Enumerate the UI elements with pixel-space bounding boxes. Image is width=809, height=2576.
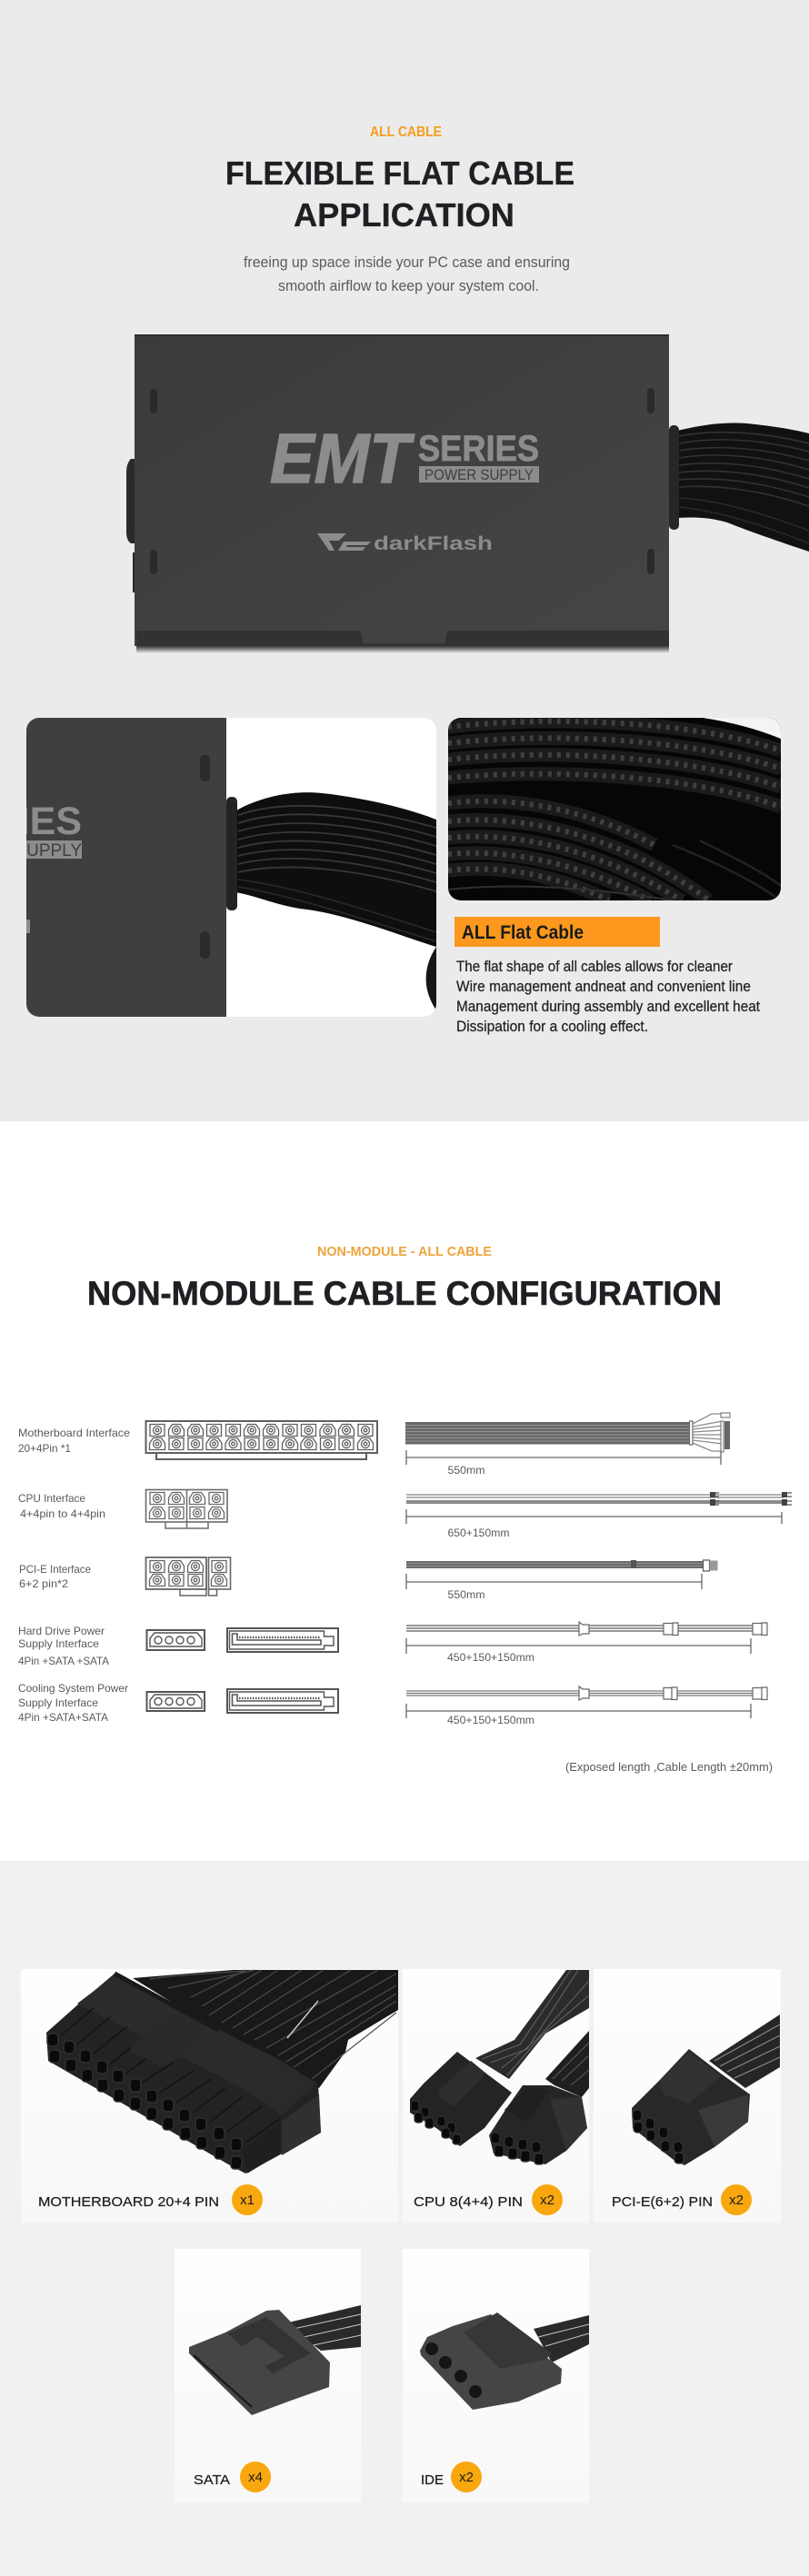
panel: cpu connector — [403, 1969, 589, 2223]
caption: PCI-E(6+2) PIN — [612, 2194, 713, 2210]
description text: Management during assembly and excellent heat — [456, 998, 760, 1015]
section: connector photos background — [0, 1861, 809, 2576]
title: flexible flat cable application: APPLICATION — [294, 196, 514, 234]
connector diagram: 24 pin — [145, 1421, 377, 1459]
cable bundle — [405, 1422, 689, 1445]
description text: Dissipation for a cooling effect. — [456, 1018, 648, 1035]
housing top — [77, 1975, 282, 2088]
slots — [200, 755, 210, 959]
orange label bar — [454, 917, 660, 947]
connector base silhouette — [46, 1974, 321, 2173]
close-up background — [448, 718, 781, 900]
slot — [194, 2355, 252, 2407]
cable one — [475, 1970, 589, 2079]
title: flexible flat cable application — [225, 154, 574, 234]
dimension line — [406, 1638, 751, 1654]
collar — [689, 1421, 693, 1445]
connectors — [710, 1492, 787, 1506]
caption: IDE — [421, 2472, 444, 2488]
cable highlights — [150, 1970, 396, 2079]
body — [189, 2310, 330, 2415]
badge x4 — [240, 2462, 271, 2492]
wires — [534, 2315, 589, 2362]
badge x2: x2 — [540, 2193, 554, 2208]
note: exposed length: (Exposed length ,Cable Length ±20mm) — [565, 1761, 773, 1774]
length: 450+150+150mm — [447, 1714, 534, 1726]
pin block separators — [61, 2008, 280, 2143]
photo background — [21, 1969, 398, 2223]
fan out wires — [693, 1414, 723, 1451]
right side face — [550, 2097, 587, 2151]
clip well — [227, 2317, 311, 2373]
subtitle text — [244, 254, 570, 294]
clip — [464, 2312, 552, 2369]
panel: braided cable close-up — [448, 718, 781, 900]
caption: SATA — [194, 2472, 230, 2488]
logo: darkFlash: darkFlash — [374, 533, 493, 554]
logo: darkFlash — [317, 533, 491, 551]
psu body — [135, 334, 669, 646]
connector diagram: cooling 4 pin — [147, 1692, 205, 1711]
white streak — [287, 2001, 318, 2038]
product image: power supply with cables — [126, 334, 809, 653]
connector diagram: pci-e 6+2 — [145, 1557, 231, 1596]
dimension line — [406, 1450, 721, 1465]
motherboard label — [18, 1427, 130, 1455]
hard drive label: Hard Drive Power — [18, 1625, 105, 1637]
left filler to crop logo — [0, 800, 26, 863]
mounting slots — [150, 388, 654, 574]
badge x1: x1 — [240, 2193, 255, 2208]
connector diagram: cpu 4+4 — [145, 1490, 227, 1528]
clip — [238, 2337, 285, 2369]
panel background — [226, 718, 436, 1017]
photo background — [403, 2249, 589, 2502]
panel: motherboard connector — [21, 1969, 398, 2223]
right connector — [489, 2085, 587, 2164]
cropped series logo: UPPLY — [26, 841, 82, 860]
photo background — [403, 1969, 589, 2223]
cable bundle — [677, 423, 809, 552]
right top face — [242, 2061, 316, 2115]
hard drive label: Supply Interface — [18, 1637, 99, 1650]
latch — [131, 2014, 203, 2067]
cable diagram: motherboard 550mm — [405, 1413, 730, 1477]
hard drive label — [18, 1625, 109, 1667]
badge x2: x2 — [459, 2470, 474, 2485]
cable diagram: hard drive 450+150+150mm — [406, 1622, 767, 1664]
cable two — [545, 2031, 589, 2097]
wires — [285, 2305, 361, 2351]
length: 550mm — [447, 1464, 485, 1477]
cable diagram: cooling 450+150+150mm — [406, 1686, 767, 1726]
panel: pci-e connector — [594, 1969, 781, 2223]
length: 650+150mm — [447, 1527, 509, 1539]
badge x1 — [232, 2184, 263, 2215]
grommet — [226, 797, 237, 910]
panel: ide connector — [403, 2249, 589, 2502]
wire gaps — [538, 2324, 589, 2346]
logo: EMT series power supply: SERIES — [418, 429, 539, 469]
left latch — [439, 2061, 486, 2106]
description text: The flat shape of all cables allows for cleaner — [456, 958, 733, 975]
white corner — [703, 718, 781, 739]
logo: EMT series power supply: POWER SUPPLY — [424, 466, 534, 483]
cable bundle — [235, 792, 436, 1010]
length: 450+150+150mm — [447, 1651, 534, 1664]
panel: side view of psu and cables — [0, 718, 436, 1017]
subtitle text: freeing up space inside your PC case and ensuring — [244, 254, 570, 271]
cpu label: 4+4pin to 4+4pin — [20, 1507, 105, 1520]
title: flexible flat cable application: FLEXIBLE FLAT CABLE — [225, 154, 574, 192]
cable highlights — [714, 2024, 780, 2078]
pin holes — [633, 2110, 684, 2163]
subtitle text: smooth airflow to keep your system cool. — [278, 277, 539, 294]
strand bodies — [448, 721, 781, 900]
left pin holes — [411, 2101, 461, 2144]
eyebrow: non-module all cable: NON-MODULE - ALL CABLE — [317, 1244, 492, 1259]
cooling system label: Cooling System Power — [18, 1682, 128, 1695]
cropped series logo: IES — [19, 800, 82, 843]
wire gaps — [289, 2314, 361, 2347]
psu side — [26, 718, 226, 1017]
left nub — [133, 552, 135, 592]
badge x2 — [451, 2462, 482, 2492]
left switch bulge — [126, 459, 135, 543]
badge x2 — [532, 2184, 563, 2215]
cpu label — [18, 1492, 105, 1520]
dimension line — [406, 1574, 702, 1589]
connector body — [632, 2049, 750, 2165]
cable one highlights — [482, 1970, 589, 2075]
badge x2 — [721, 2184, 752, 2215]
pci-e label: PCI-E Interface — [19, 1563, 91, 1576]
cooling system label: Supply Interface — [18, 1696, 98, 1709]
panel: sata connector — [175, 2249, 361, 2502]
length: 550mm — [447, 1588, 485, 1601]
photo background — [594, 1969, 781, 2223]
strand braid highlights — [448, 721, 781, 900]
section: flexible flat cable background — [0, 0, 809, 1121]
description text — [456, 958, 760, 1035]
cable diagram: pci-e 550mm — [406, 1560, 718, 1601]
pin holes — [47, 2034, 242, 2169]
connector diagram: cooling sata — [227, 1689, 338, 1713]
cropped series logo — [26, 807, 82, 933]
section: cable configuration background — [0, 1121, 809, 1861]
ridge strip — [115, 1974, 218, 2030]
pin holes — [425, 2342, 482, 2398]
cables — [133, 1970, 398, 2088]
badge x4: x4 — [248, 2470, 263, 2485]
caption: CPU 8(4+4) PIN — [414, 2194, 523, 2210]
wires — [406, 1691, 753, 1696]
motherboard label: Motherboard Interface — [18, 1427, 130, 1439]
right side face — [282, 2094, 321, 2155]
photo background — [175, 2249, 361, 2502]
connector — [704, 1560, 709, 1571]
wires — [406, 1495, 784, 1497]
connector — [721, 1413, 730, 1452]
right pin holes — [491, 2133, 544, 2164]
cable grommet — [669, 425, 679, 530]
logo: EMT series power supply: EMT — [270, 420, 415, 498]
interface labels — [18, 1427, 130, 1724]
connector diagram: hard drive sata — [227, 1628, 338, 1652]
callout: all flat cable — [454, 917, 760, 1035]
hard drive label: 4Pin +SATA +SATA — [18, 1655, 109, 1667]
title: non-module cable configuration: NON-MODULE CABLE CONFIGURATION — [87, 1275, 722, 1312]
bottom shadow — [136, 646, 669, 652]
cooling system label — [18, 1682, 128, 1724]
lower right pin block — [243, 2122, 280, 2173]
description text: Wire management andneat and convenient line — [456, 978, 751, 995]
pci-e label: 6+2 pin*2 — [19, 1577, 68, 1590]
logo: EMT series power supply — [271, 433, 539, 483]
cable two highlights — [553, 2043, 589, 2085]
dimension line — [406, 1704, 751, 1718]
caption: MOTHERBOARD 20+4 PIN — [38, 2194, 219, 2210]
latch — [659, 2052, 721, 2104]
cooling system label: 4Pin +SATA+SATA — [18, 1711, 108, 1724]
cables — [709, 2014, 780, 2088]
bottom edge strand — [448, 886, 673, 900]
right latch — [504, 2087, 550, 2122]
connector diagram: hard drive 4 pin — [147, 1630, 205, 1650]
cpu label: CPU Interface — [18, 1492, 85, 1505]
dimension line — [406, 1509, 782, 1524]
pci-e label — [19, 1563, 91, 1590]
badge x2: x2 — [729, 2193, 744, 2208]
label text: ALL Flat Cable — [462, 922, 584, 943]
cable diagram: cpu 650+150mm — [406, 1492, 792, 1539]
lower right strands — [673, 840, 781, 900]
motherboard label: 20+4Pin *1 — [18, 1442, 71, 1455]
wires — [406, 1561, 703, 1568]
bottom flap — [136, 631, 669, 646]
wires — [406, 1626, 753, 1631]
body — [420, 2314, 562, 2410]
connectors — [579, 1686, 589, 1700]
top edge — [135, 334, 669, 336]
left connector — [410, 2052, 512, 2146]
connectors — [579, 1622, 589, 1636]
eyebrow: all cable: ALL CABLE — [370, 124, 442, 140]
side face — [698, 2094, 748, 2147]
